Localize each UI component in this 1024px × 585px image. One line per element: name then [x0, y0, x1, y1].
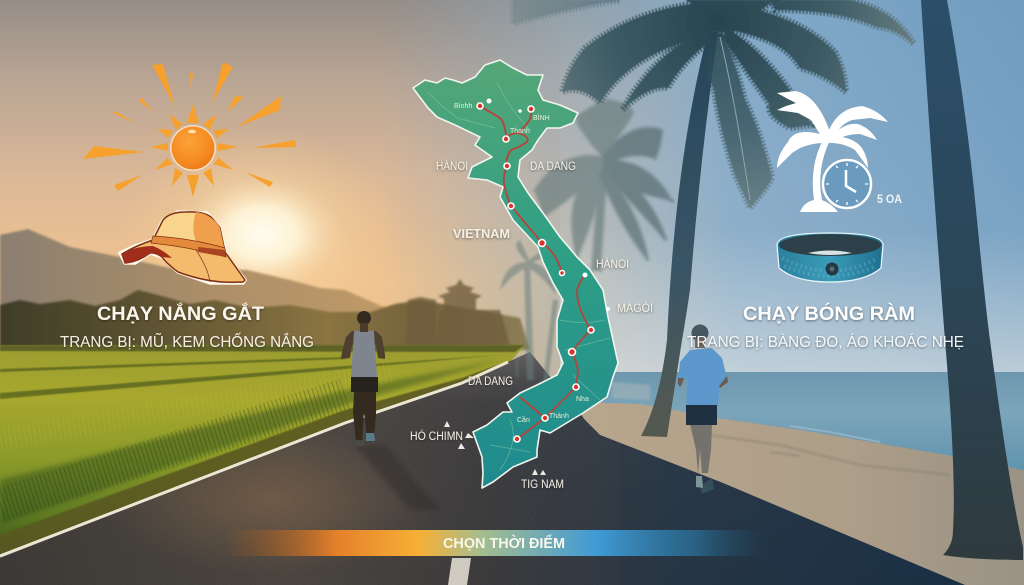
map labels: HÀNOI	[596, 258, 629, 271]
distant palm trees	[500, 240, 558, 382]
beach	[575, 402, 1024, 585]
map labels: DA DANG	[530, 161, 576, 173]
small map labels: Cần	[517, 415, 530, 424]
foreground palm trunk	[921, 0, 1023, 560]
map shape	[413, 60, 618, 488]
small map labels: Thanh	[510, 128, 530, 135]
route stops	[477, 103, 594, 442]
small map labels: BÌNH	[533, 113, 550, 122]
map labels: TIG NAM	[521, 479, 564, 491]
icon: palm tree with clock	[777, 91, 902, 212]
icon: wristband	[777, 233, 883, 282]
medium palm tree	[535, 100, 671, 270]
small map labels: Thành	[549, 413, 569, 420]
mountains	[0, 229, 395, 350]
map labels	[410, 160, 653, 491]
map labels: MAGÓI	[617, 302, 653, 315]
bottom gradient bar	[225, 530, 780, 556]
small map labels: Bìnhh	[454, 103, 472, 110]
map rivers	[428, 82, 610, 470]
large palm tree	[513, 0, 914, 437]
runner: left silhouette	[341, 311, 385, 446]
small mountain markers	[444, 421, 546, 475]
map labels: DA DANG	[468, 376, 513, 388]
sea	[600, 372, 1024, 472]
road	[0, 350, 965, 585]
icon: sun hat	[120, 212, 245, 283]
left equipment text: TRANG BỊ: MŨ, KEM CHỐNG NẮNG	[60, 331, 314, 351]
map of Vietnam	[410, 60, 653, 491]
map labels: HÓ CHIMN	[410, 430, 463, 443]
icon: palm tree with clock: 5 OA	[877, 192, 902, 206]
icon: sun	[83, 62, 296, 197]
photo background: sunset sky and blue sky	[0, 0, 1024, 400]
left heading: CHẠY NẮNG GẮT	[97, 303, 264, 325]
treeline	[0, 290, 530, 350]
small map labels: Nha	[576, 396, 589, 403]
small map labels	[454, 103, 589, 424]
rice field	[0, 345, 525, 557]
map labels: VIETNAM	[453, 227, 510, 241]
right heading: CHẠY BÓNG RÀM	[743, 301, 915, 325]
right equipment text: TRANG BỊ: BÀNG ĐO, ÁO KHOÁC NHẸ	[687, 332, 964, 351]
map labels: HÀNOI	[436, 160, 468, 173]
route line	[480, 106, 591, 439]
pagoda	[406, 279, 510, 345]
runner: right in blue shirt	[678, 324, 728, 494]
white map dots	[486, 98, 610, 311]
bottom gradient bar: CHỌN THỜI ĐIỂM	[443, 534, 565, 552]
